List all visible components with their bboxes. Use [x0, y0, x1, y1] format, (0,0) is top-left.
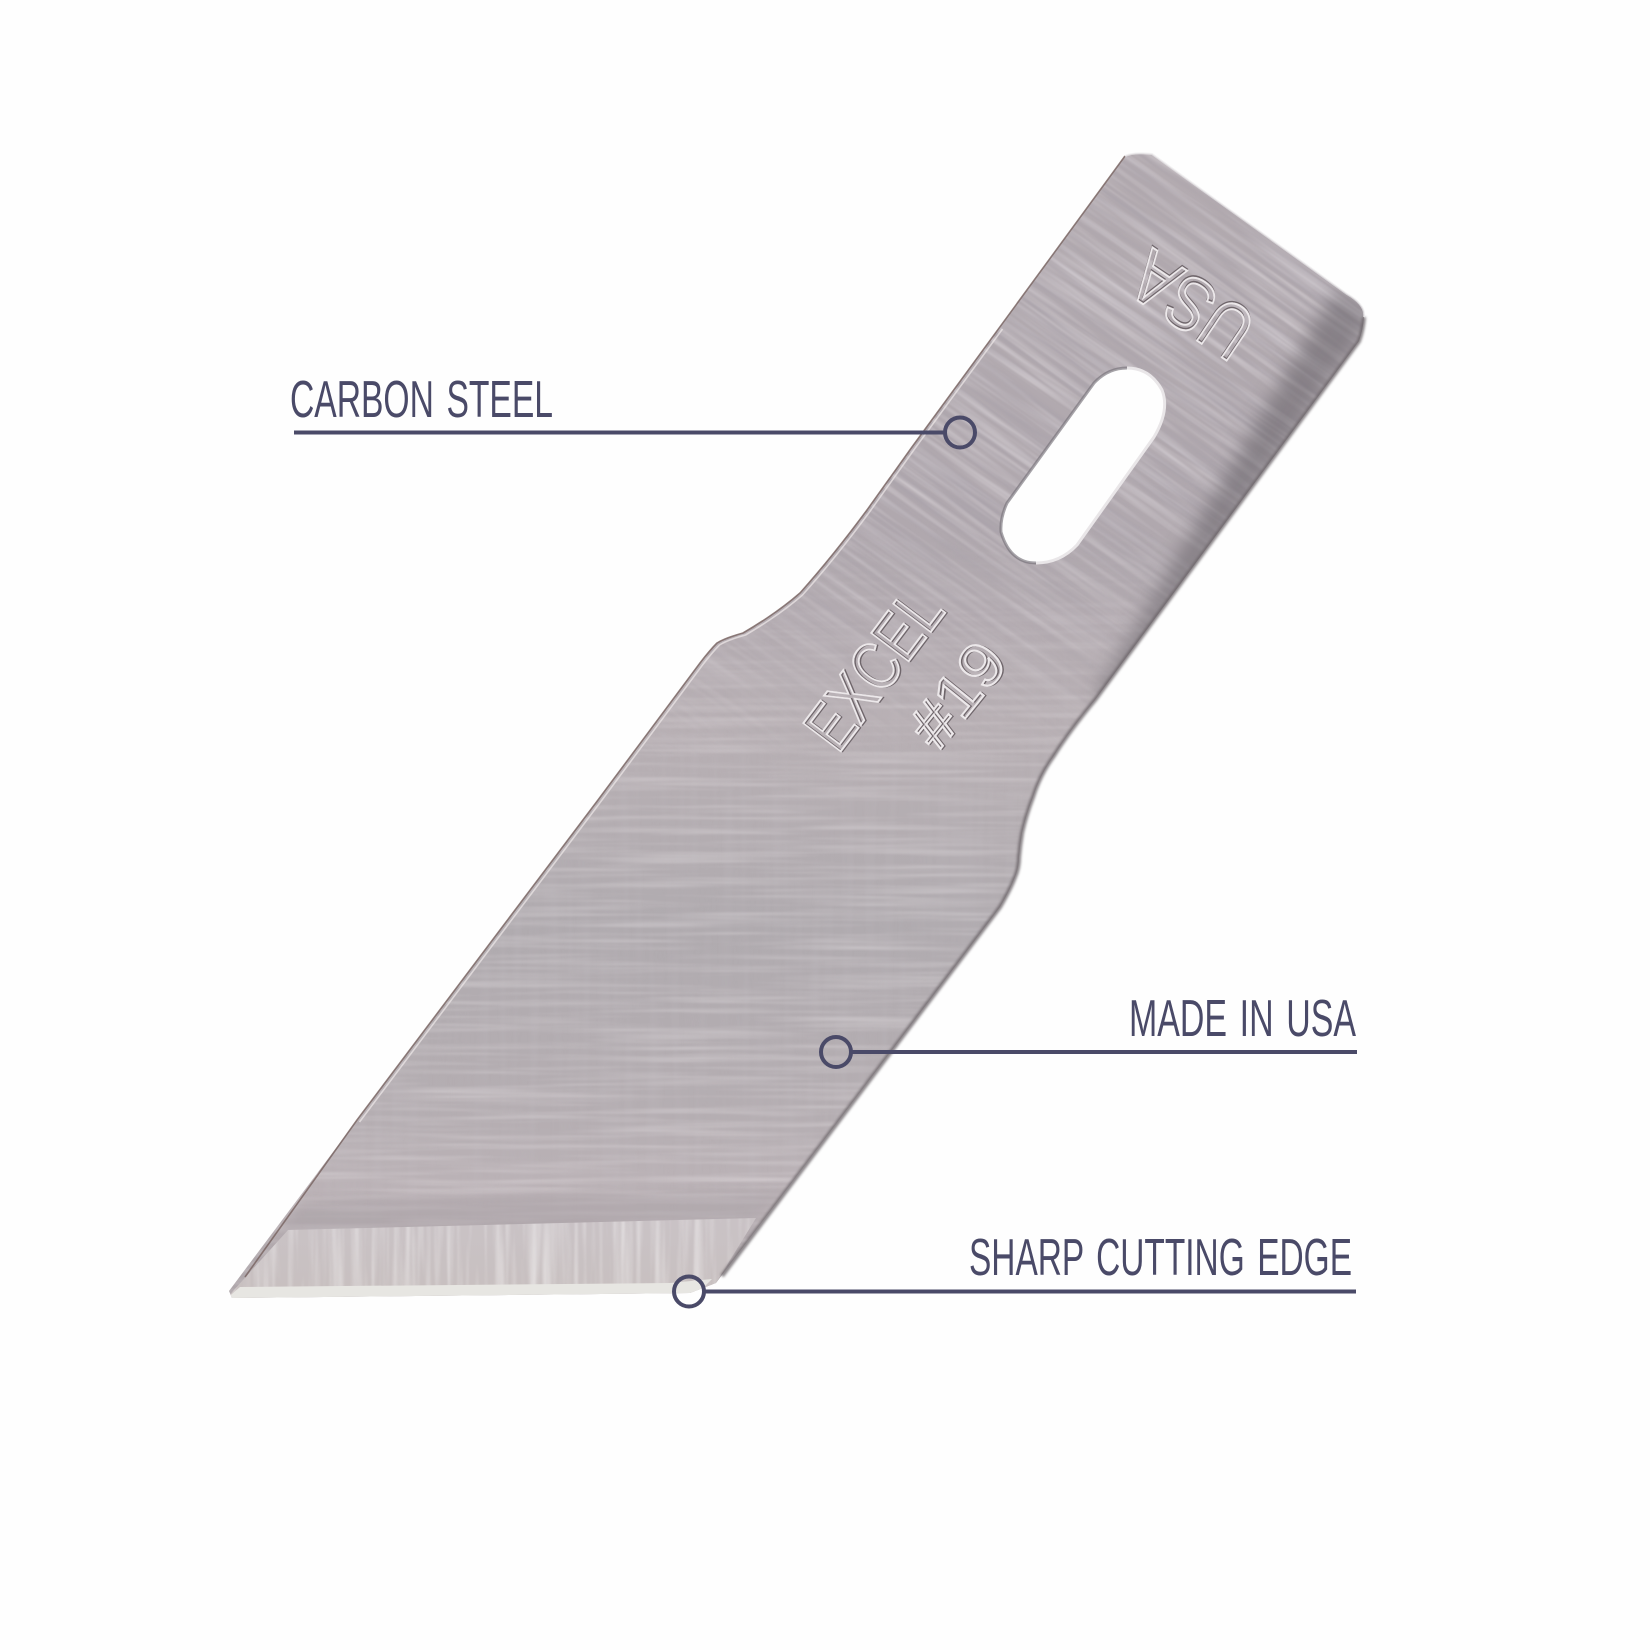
infographic: blade diagram [229, 152, 1368, 1308]
label: made in usa: MADE IN USA [1129, 990, 1356, 1048]
label: sharp cutting edge: SHARP CUTTING EDGE [969, 1229, 1352, 1287]
leader line: made in usa [851, 1050, 1357, 1054]
darker band above bevel [287, 1192, 779, 1230]
callout: sharp cutting edge [674, 1229, 1356, 1306]
blade body [229, 153, 1364, 1298]
stamp: USA: USA [1114, 231, 1270, 375]
callout: carbon steel [290, 371, 975, 448]
callout: made in usa [821, 990, 1357, 1067]
bevel grind texture [233, 1220, 749, 1292]
stamp: USA: USA [1114, 233, 1270, 376]
cutting bevel [225, 1218, 756, 1300]
leader line: sharp cutting edge [704, 1290, 1356, 1294]
edge shading [722, 317, 1364, 1276]
brushed texture: lower blade [230, 684, 1092, 1290]
brushed texture: handle [705, 154, 1363, 665]
marker: carbon steel [945, 418, 975, 448]
stamp: EXCEL: EXCEL [791, 575, 960, 764]
blade [229, 152, 1368, 1298]
stamp: #19: #19 [895, 629, 1021, 761]
inner edge highlight [360, 329, 1002, 1122]
handle edge shading [1095, 290, 1375, 705]
stamp: EXCEL: EXCEL [789, 575, 958, 764]
marker: made in usa [821, 1037, 851, 1067]
label: carbon steel: CARBON STEEL [290, 371, 553, 429]
stamp: #19: #19 [897, 629, 1022, 761]
marker: sharp cutting edge [674, 1276, 704, 1306]
slot highlight [1036, 368, 1165, 563]
white edge strip [231, 1279, 712, 1298]
leader line: carbon steel [294, 430, 945, 434]
